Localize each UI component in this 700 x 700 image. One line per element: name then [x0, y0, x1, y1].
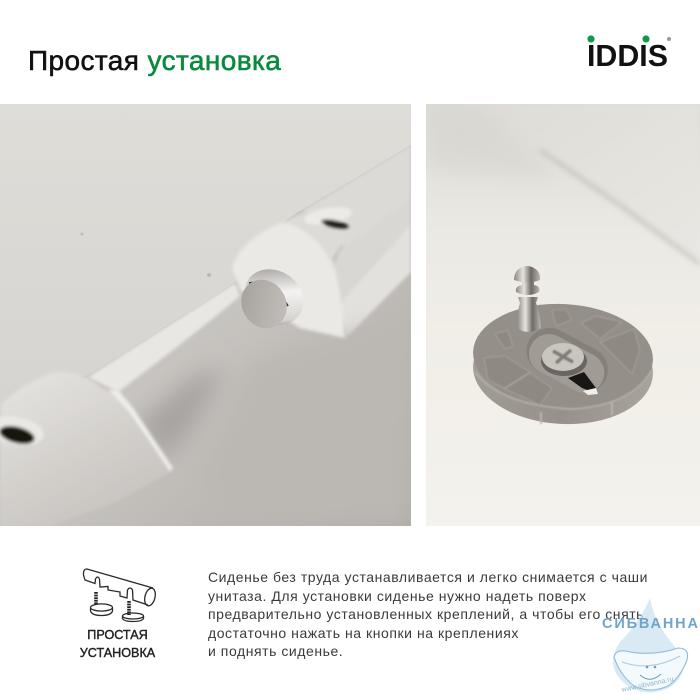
left hole — [0, 412, 46, 450]
watermark: sibvanna: СИБВАННА — [602, 616, 699, 632]
icon: seat tube with mounts — [82, 568, 156, 622]
right hinge block — [232, 207, 353, 338]
left peg — [94, 592, 98, 605]
icon caption: УСТАНОВКА — [80, 646, 155, 660]
photo: mounting disc with pin — [426, 104, 700, 526]
description text — [208, 569, 648, 659]
seat specks — [80, 232, 211, 277]
black slot opening — [568, 372, 596, 391]
description text: Сиденье без труда устанавливается и легко снимается с чаши — [208, 569, 648, 585]
watermark: sibvanna: www.sibvanna.ru — [620, 676, 674, 694]
icon caption — [80, 628, 156, 660]
description text: достаточно нажать на кнопки на креплениях — [208, 625, 519, 641]
disc slot — [518, 320, 616, 401]
icon caption: ПРОСТАЯ — [87, 628, 148, 642]
top hole — [303, 204, 353, 230]
description text: и поднять сиденье. — [208, 643, 343, 659]
right peg — [127, 601, 131, 615]
chrome pin — [514, 266, 541, 332]
shadow recess — [135, 320, 411, 526]
title: Простая установка — [28, 45, 281, 76]
description text: унитаза. Для установки сиденье нужно надеть поверх — [208, 588, 587, 604]
screw — [541, 343, 587, 376]
disc — [470, 299, 656, 429]
seat flat surface — [0, 104, 411, 405]
photo: seat hinge with chrome button — [0, 104, 411, 526]
disc pads — [484, 309, 640, 405]
chrome button — [232, 258, 314, 337]
rim highlight — [88, 145, 411, 392]
description text: предварительно установленных креплений, а чтобы его снять — [208, 606, 644, 622]
background basin edge — [460, 104, 700, 263]
watermark: sibvanna — [602, 598, 699, 694]
left hinge block — [0, 372, 170, 526]
logo: iddis: IDDIS — [587, 38, 668, 73]
